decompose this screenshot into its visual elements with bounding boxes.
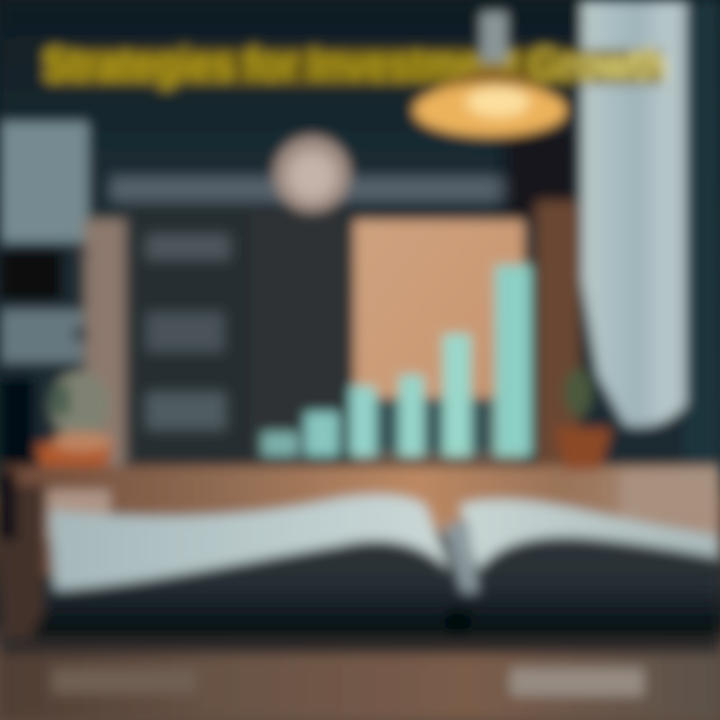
lamp cord: [481, 12, 507, 62]
table surface: [0, 466, 720, 576]
potted plant right: [555, 368, 612, 470]
lamp shade: [414, 68, 566, 135]
book cover: [32, 530, 720, 640]
dark corner above post: [505, 130, 575, 220]
peach wall panel: [354, 220, 524, 458]
footer caption right: [510, 668, 644, 696]
title band shading: [46, 50, 662, 84]
spine shadow: [444, 608, 472, 636]
open book: [32, 495, 720, 640]
left table edge: [0, 485, 44, 655]
pale cloth right: [620, 470, 720, 520]
dark backdrop behind lower bars: [372, 398, 494, 456]
footer caption left: [52, 668, 197, 694]
table front: [0, 638, 720, 720]
left shelf items: [0, 122, 126, 528]
wall clock: [274, 136, 350, 212]
pale cloth left: [48, 490, 110, 540]
potted plant left: [36, 371, 112, 492]
right wall strip: [684, 0, 720, 470]
curtain: [582, 0, 686, 426]
wooden post: [535, 200, 581, 470]
left page: [50, 495, 450, 590]
right page: [460, 500, 720, 570]
spine: [444, 520, 478, 592]
lamp glow: [414, 84, 566, 136]
shelving unit: [110, 176, 510, 465]
bar chart: [262, 265, 531, 456]
pendant lamp: [414, 12, 566, 136]
